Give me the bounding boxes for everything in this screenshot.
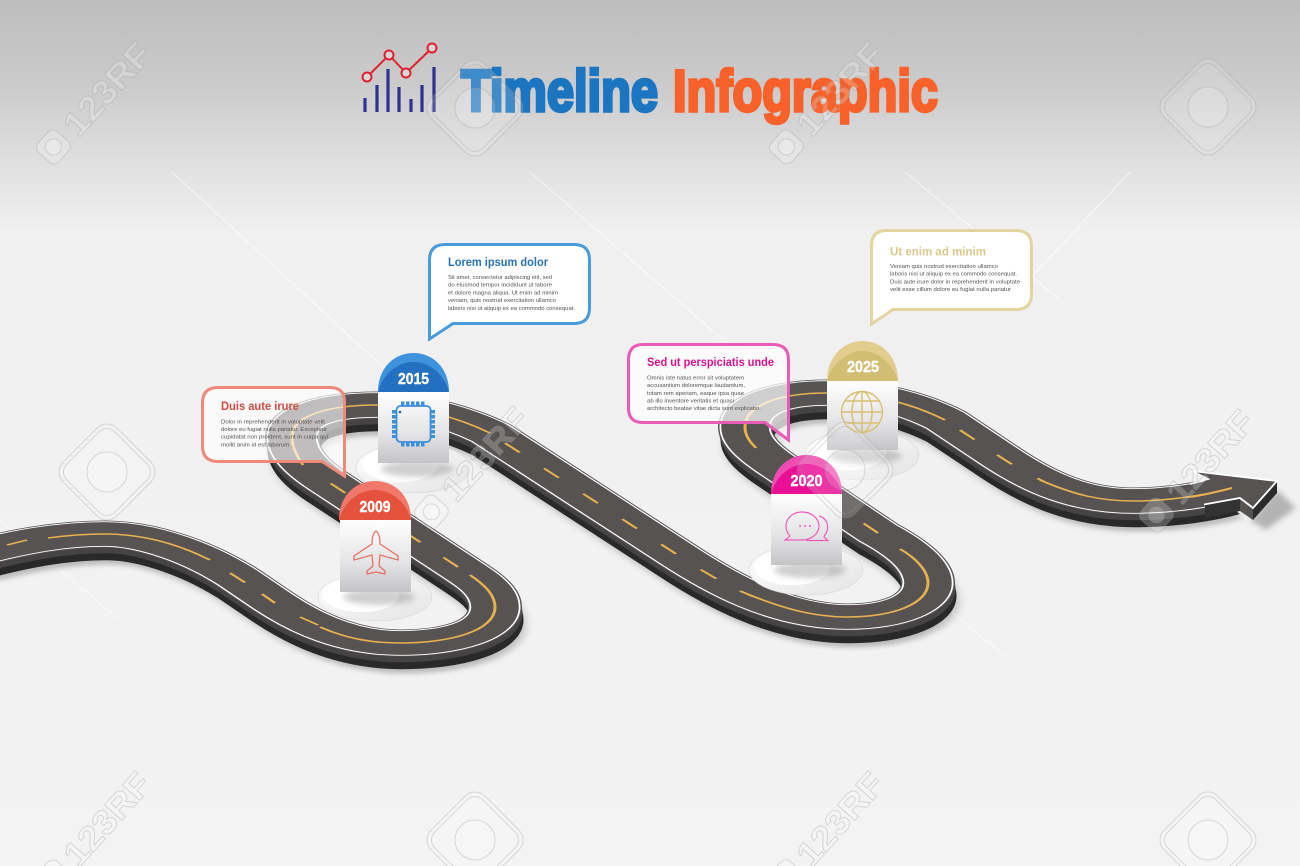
callout body text: Dolor in reprehenderit in voluptate velit: [221, 420, 326, 426]
callout body text: ab illo inventore veritatis et quasi: [647, 398, 734, 404]
road centre line: [7, 393, 1232, 643]
watermarks: 123RF: [56, 35, 159, 144]
callout body text: mollit anim id est laborum.: [221, 442, 292, 448]
pin: 2015: [356, 353, 470, 493]
callout body text: Duis aute irure dolor in reprehenderit in voluptate: [890, 280, 1020, 286]
icon: microchip: [394, 404, 433, 444]
road arrowhead: [1190, 471, 1296, 530]
watermarks: 123RF: [1159, 403, 1262, 512]
callout body text: Veniam quis nostrud exercitation ullamco: [890, 264, 998, 270]
thin diagonal light streaks: [0, 172, 1130, 660]
icon: chat bubbles: [785, 512, 828, 540]
callout body text: et dolore magna aliqua. Ut enim ad minim: [448, 290, 558, 296]
title: [461, 59, 938, 124]
callout: Lorem ipsum dolor: [430, 244, 590, 339]
callout heading: Lorem ipsum dolor: [448, 257, 548, 269]
pin: 2015: 2015: [398, 371, 429, 388]
callout body text: do eiusmod tempor incididunt ut labore: [448, 282, 552, 288]
watermarks: 123RF: [434, 400, 537, 509]
callout body text: cupidatat non proident, sunt in culpa qui: [221, 434, 328, 440]
callout body text: veniam, quis nostrud exercitation ullamco: [448, 298, 556, 304]
callout body text: [890, 264, 1020, 293]
title: Infographic: [673, 59, 938, 124]
callout body text: Omnis iste natus error sit voluptatem: [647, 376, 744, 382]
callout heading: Sed ut perspiciatis unde: [647, 357, 774, 369]
callout heading: Ut enim ad minim: [890, 246, 986, 258]
callout body text: architecto beatae vitae dicta sunt explicabo.: [647, 406, 761, 412]
callout: Ut enim ad minim: [872, 230, 1032, 324]
pin: 2025: [805, 341, 919, 480]
pin: 2009: 2009: [360, 499, 391, 516]
callout body text: laboris nisi ut aliquip ex ea commodo consequat.: [448, 306, 576, 312]
callout body text: accusantium doloremque laudantium,: [647, 383, 745, 389]
icon: chart logo: [362, 44, 436, 112]
road: [0, 393, 1232, 661]
pin: 2025: 2025: [847, 359, 879, 376]
callout body text: dolore eu fugiat nulla pariatur. Excepteur: [221, 427, 327, 433]
callout body text: velit esse cillum dolore eu fugiat nulla pariatur: [890, 287, 1011, 293]
callout body text: [221, 420, 328, 448]
pin: 2020: 2020: [790, 473, 823, 490]
title: Timeline: [461, 59, 658, 124]
callout body text: totam rem aperiam, eaque ipsa quae: [647, 391, 744, 397]
callout body text: [448, 275, 576, 312]
icon: airplane: [354, 531, 398, 574]
callout heading: Duis aute irure: [221, 401, 299, 413]
icon: globe: [842, 392, 882, 432]
watermarks: 123RF: [789, 35, 892, 144]
callout: Sed ut perspiciatis unde: [628, 344, 788, 440]
pin: 2020: [749, 455, 863, 595]
callout: Duis aute irure: [202, 388, 344, 476]
callout body text: laboris nisi ut aliquip ex ea commodo consequat.: [890, 272, 1018, 278]
callout body text: [647, 376, 761, 412]
pin: 2009: [318, 481, 432, 621]
callout body text: Sit amet, consectetur adipiscing elit, sed: [448, 275, 552, 281]
